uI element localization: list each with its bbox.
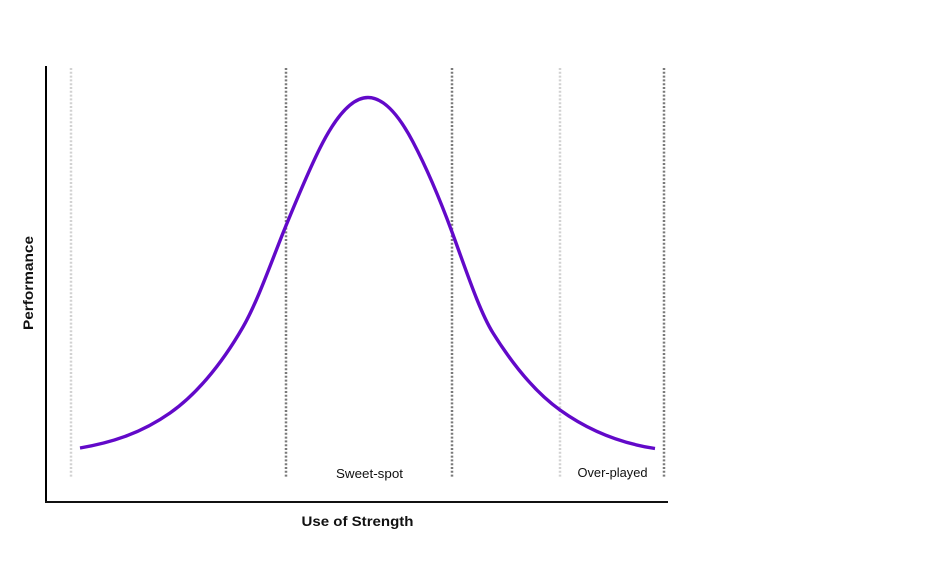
y axis line: [45, 66, 47, 503]
marker: over-played right dotted line: [663, 68, 665, 478]
marker: over-played left light dotted line: [559, 68, 561, 478]
label: sweet-spot: Sweet-spot: [336, 467, 404, 481]
marker: sweet-spot left dotted line: [285, 68, 287, 478]
purple performance curve: [80, 98, 655, 448]
label: over-played: Over-played: [578, 466, 648, 480]
marker: outer left light dotted line: [70, 68, 72, 478]
marker: sweet-spot right dotted line: [451, 68, 453, 478]
x axis line: [45, 501, 668, 503]
y axis title: Performance: [20, 236, 36, 330]
x axis title: Use of Strength: [302, 513, 414, 529]
